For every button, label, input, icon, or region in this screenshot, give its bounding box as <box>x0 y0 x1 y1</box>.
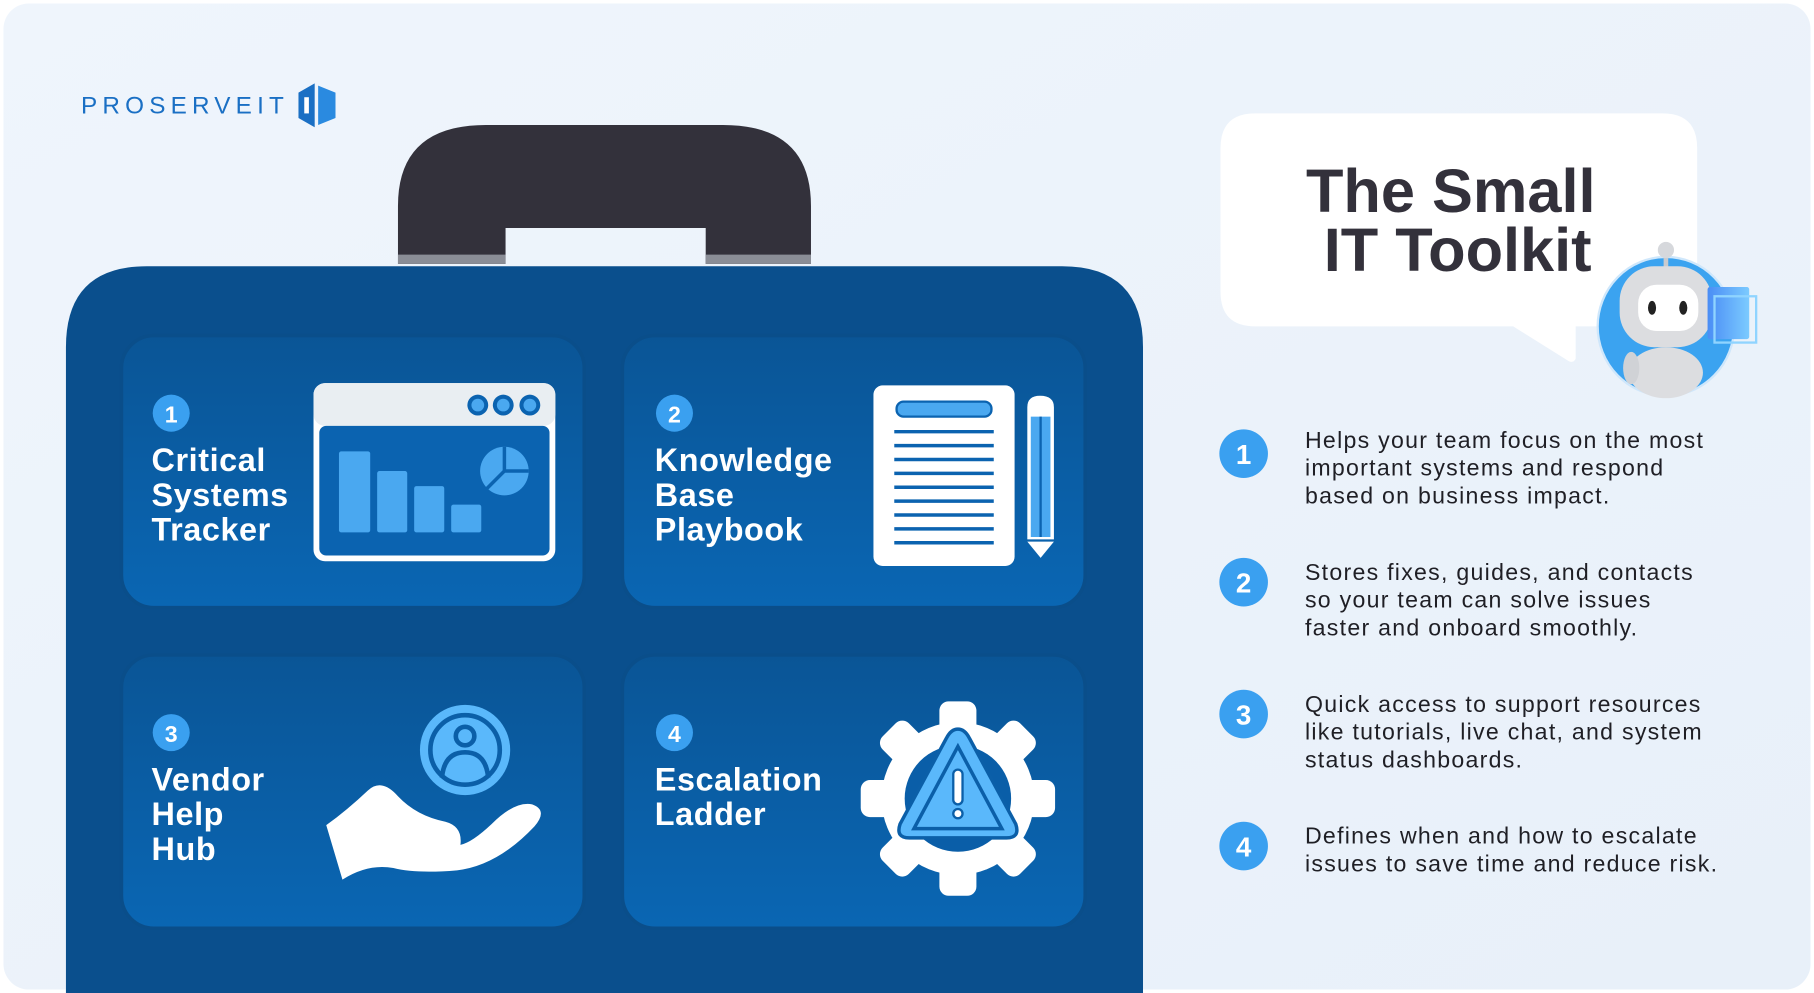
list item 2: so your team can solve issues <box>1305 587 1652 613</box>
list item 4 <box>1219 822 1718 876</box>
list item 1: important systems and respond <box>1305 455 1664 481</box>
list item 2 <box>1219 558 1694 640</box>
list item 4: issues to save time and reduce risk. <box>1305 850 1718 876</box>
panel 3: vendor help hub <box>121 655 584 928</box>
list item 1: 1 <box>1236 439 1251 470</box>
icon: document and pencil <box>873 385 1054 566</box>
list item 2: Stores fixes, guides, and contacts <box>1305 559 1694 585</box>
list item 2: 2 <box>1236 568 1251 599</box>
logo: PROSERVEIT <box>81 92 289 119</box>
list item 4: Defines when and how to escalate <box>1305 823 1698 849</box>
list item 1 <box>1219 427 1704 508</box>
briefcase handle <box>398 125 811 264</box>
panel 1: critical systems tracker: Systems <box>152 477 289 513</box>
icon: gear with warning <box>861 701 1055 896</box>
panel 3: vendor help hub: 3 <box>165 721 178 747</box>
list item 2: faster and onboard smoothly. <box>1305 614 1638 640</box>
list item 3: Quick access to support resources <box>1305 691 1702 717</box>
panel 2: knowledge base playbook: Base <box>655 477 735 513</box>
panel 1: critical systems tracker: Tracker <box>152 511 271 547</box>
panel 3: vendor help hub: Hub <box>152 831 216 867</box>
list item 3: 3 <box>1236 699 1251 730</box>
briefcase body <box>66 266 1143 993</box>
panel 3: vendor help hub: Vendor <box>152 761 265 797</box>
panel 4: escalation ladder: Ladder <box>655 796 766 832</box>
panel 2: knowledge base playbook <box>622 336 1085 608</box>
list item 1: based on business impact. <box>1305 482 1611 508</box>
icon: dashboard window <box>314 383 555 561</box>
panel 2: knowledge base playbook: 2 <box>668 401 681 427</box>
list item 1: Helps your team focus on the most <box>1305 427 1704 453</box>
speech bubble title: IT Toolkit <box>1324 215 1592 284</box>
panel 1: critical systems tracker: 1 <box>165 401 178 427</box>
panel 2: knowledge base playbook: Knowledge <box>655 442 833 478</box>
panel 4: escalation ladder <box>622 655 1085 928</box>
panel 2: knowledge base playbook: Playbook <box>655 511 804 547</box>
panel 4: escalation ladder: Escalation <box>655 761 822 797</box>
panel 1: critical systems tracker: Critical <box>152 442 266 478</box>
list item 3: status dashboards. <box>1305 746 1523 772</box>
speech bubble title: The Small <box>1306 156 1596 225</box>
list item 3: like tutorials, live chat, and system <box>1305 719 1703 745</box>
icon: robot mascot <box>1598 242 1756 398</box>
panel 3: vendor help hub: Help <box>152 796 224 832</box>
list item 4: 4 <box>1236 831 1252 862</box>
panel 4: escalation ladder: 4 <box>668 721 681 747</box>
icon: hand with person <box>326 705 541 880</box>
panel 1: critical systems tracker <box>121 336 584 608</box>
speech bubble title <box>1221 113 1697 362</box>
list item 3 <box>1219 690 1703 772</box>
logo <box>81 83 335 127</box>
